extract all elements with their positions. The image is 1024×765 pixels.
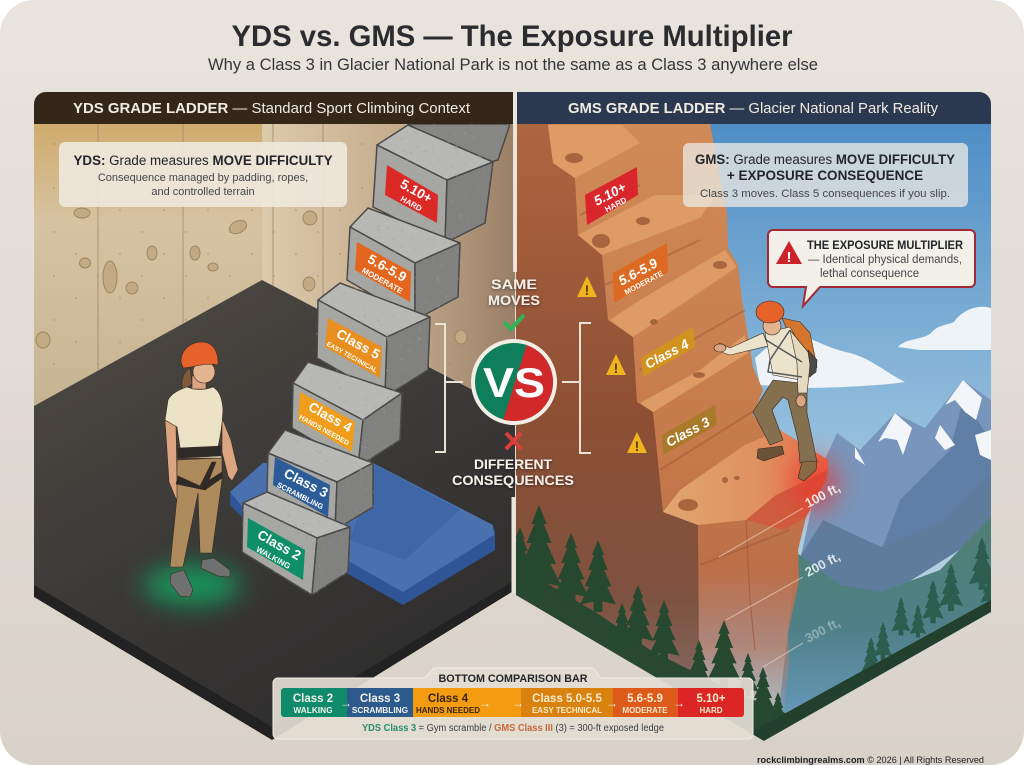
label: class 2: Class 2 — [255, 527, 304, 563]
exposure drop lines — [719, 508, 803, 667]
different consequences label: CONSEQUENCES — [452, 472, 574, 488]
front arm — [715, 333, 768, 355]
ponytail — [182, 368, 192, 390]
label: class 3: Class 3 — [282, 466, 331, 501]
segment: class 5.0-5.5: EASY TECHNICAL — [532, 706, 602, 715]
icon: check — [504, 315, 524, 329]
segment: 5.6-5.9 — [613, 688, 678, 717]
label: class 3: SCRAMBLING — [275, 480, 325, 511]
stone 5.6-5.9 — [347, 208, 460, 320]
segment: 5.6-5.9: 5.6-5.9 — [627, 693, 663, 705]
cliff label: class 3 — [662, 405, 717, 455]
different consequences label: DIFFERENT — [474, 456, 552, 472]
label: class 2 — [247, 518, 305, 580]
straps — [766, 330, 802, 377]
legs — [170, 458, 222, 567]
segment: 5.6-5.9: MODERATE — [622, 706, 668, 715]
stone class 4 — [292, 362, 402, 467]
segment: class 2 — [281, 688, 347, 717]
boots — [757, 446, 784, 461]
wall texture dots — [53, 143, 494, 365]
clouds — [755, 307, 991, 388]
label: class 5 — [325, 318, 383, 378]
mountain snow — [855, 380, 991, 465]
right gym wall — [262, 124, 515, 412]
progression arrows: → — [606, 696, 618, 710]
label: 5.6-5.9 moderate: MODERATE — [360, 266, 405, 296]
helmet — [756, 301, 784, 323]
valley forest haze — [760, 517, 991, 741]
shirt — [165, 387, 223, 458]
figure: alpine climber — [714, 301, 817, 481]
warning triangle 2: ! — [614, 360, 618, 376]
progression arrows: → — [340, 696, 352, 710]
wall holds — [36, 208, 467, 348]
head — [192, 376, 206, 389]
warning triangle 2 — [606, 354, 626, 376]
conifer trees — [506, 505, 788, 730]
different consequences label — [452, 456, 574, 488]
header: GMS ladder — [516, 92, 991, 124]
segment: class 3 — [347, 688, 413, 717]
callout: exposure multiplier: lethal consequence — [820, 268, 919, 280]
lower ledge — [663, 430, 828, 525]
warning triangle 3: ! — [635, 438, 639, 454]
callout: YDS definition: and controlled terrain — [151, 186, 255, 198]
label: 5.10+ hard: HARD — [399, 194, 424, 213]
VS badge — [470, 339, 560, 425]
progression arrows: → — [479, 696, 491, 710]
cliff label: class 4 — [641, 327, 695, 377]
cliff shadow side — [516, 124, 700, 720]
floor — [34, 280, 515, 740]
cliff label: 5.6-5.9 moderate: 5.6-5.9 — [616, 255, 660, 289]
callout: GMS definition: GMS: Grade measures MOVE DIFFICULTY — [695, 152, 955, 167]
head — [763, 317, 781, 335]
segment: 5.10+ — [678, 688, 744, 717]
segment: 5.10+: 5.10+ — [696, 693, 726, 705]
segment: class 2: WALKING — [293, 705, 333, 715]
crash pad — [230, 463, 495, 605]
icon: warning: ! — [786, 249, 792, 266]
rear arm — [790, 330, 810, 393]
stone class 3 — [267, 430, 373, 530]
helmet — [181, 342, 218, 368]
stone class 5 — [317, 283, 430, 397]
warning triangle 1 — [577, 276, 597, 298]
label: 5.10+ hard — [385, 165, 438, 223]
shoes — [170, 570, 193, 597]
stone class 2 — [242, 492, 350, 595]
segment: class 5.0-5.5 — [521, 688, 613, 717]
harness — [178, 446, 221, 458]
segment: class 5.0-5.5: Class 5.0-5.5 — [532, 693, 602, 705]
left bracket — [435, 324, 463, 452]
label: class 4: Class 4 — [306, 399, 355, 435]
segment: class 4: HANDS NEEDED — [416, 706, 480, 715]
callout: YDS definition: YDS: Grade measures MOVE DIFFICULTY — [74, 153, 332, 168]
same moves label: SAME — [491, 276, 537, 292]
panel: YDS gym context — [34, 124, 515, 740]
bar heading: BOTTOM COMPARISON BAR — [438, 673, 588, 685]
segment: class 4 — [413, 688, 521, 717]
cliff label: 5.6-5.9 moderate: MODERATE — [623, 269, 665, 297]
header: YDS ladder: YDS GRADE LADDER — Standard Sport Climbing Context — [73, 100, 471, 117]
valley trees — [861, 537, 1000, 675]
title: YDS vs. GMS — The Exposure Multiplier — [232, 20, 793, 53]
bar footnote: YDS Class 3 = Gym scramble / GMS Class III (3) = 300-ft exposed ledge — [362, 723, 664, 734]
callout: GMS definition: Class 3 moves. Class 5 consequences if you slip. — [700, 188, 950, 200]
label: 5.10+ hard: 5.10+ — [398, 176, 435, 206]
figure: gym climber — [165, 342, 238, 597]
warning triangle 3 — [627, 432, 647, 454]
cliff face — [516, 124, 828, 720]
ledge front rim — [746, 470, 828, 530]
loose rocks — [565, 153, 740, 511]
same moves label: MOVES — [488, 292, 540, 308]
label: class 4 — [298, 392, 355, 452]
progression arrows: → — [673, 696, 685, 710]
bottom comparison bar — [273, 668, 753, 739]
cliff label: 5.6-5.9 moderate — [613, 243, 668, 303]
cliff label: 5.10+ hard — [585, 167, 638, 225]
cliff label: class 4: Class 4 — [642, 336, 692, 372]
segment: class 2: Class 2 — [293, 693, 333, 705]
cliff ledges — [548, 125, 748, 412]
warning triangle 1: ! — [585, 282, 589, 298]
exposure drop markers: 300 ft, — [802, 615, 843, 646]
far mountains — [798, 380, 991, 600]
subtitle: Why a Class 3 in Glacier National Park is not the same as a Class 3 anywhere else — [208, 55, 818, 74]
torso — [765, 327, 810, 380]
segment: class 3: SCRAMBLING — [352, 705, 408, 715]
label: 5.6-5.9 moderate: 5.6-5.9 — [365, 251, 409, 285]
progression arrows: → — [512, 696, 524, 710]
exposure drop markers — [802, 480, 843, 646]
left gym wall — [34, 124, 262, 406]
stone ladder — [242, 124, 510, 595]
exposure drop markers: 200 ft, — [802, 549, 843, 580]
base slab — [745, 600, 991, 741]
segment: class 4: Class 4 — [428, 693, 469, 705]
rock strata — [580, 185, 790, 565]
green floor glow — [144, 565, 240, 605]
label: 5.6-5.9 moderate — [355, 242, 411, 302]
legs — [753, 380, 817, 463]
label: class 4: HANDS NEEDED — [298, 414, 350, 447]
label: class 3 — [273, 457, 331, 517]
callout: exposure multiplier: — Identical physical demands, — [808, 254, 962, 266]
icon: cross — [506, 433, 521, 449]
column edge — [746, 520, 755, 650]
callout: YDS definition — [59, 142, 347, 207]
segment: 5.10+: HARD — [699, 706, 723, 715]
callout: GMS definition — [683, 143, 968, 207]
stone 5.10+ — [373, 125, 493, 243]
forest floor — [516, 565, 790, 741]
arms — [164, 420, 177, 500]
label: class 2: WALKING — [255, 545, 292, 571]
right bracket — [562, 323, 591, 453]
wall panel seams — [98, 124, 323, 370]
icon: warning — [776, 241, 802, 266]
panel: GMS Glacier reality — [506, 124, 1000, 741]
cliff label: 5.10+ hard: 5.10+ — [591, 179, 629, 209]
label: class 5: EASY TECHNICAL — [325, 341, 378, 375]
cliff label: class 3: Class 3 — [663, 414, 713, 450]
red danger glow — [791, 456, 839, 512]
sky — [710, 124, 991, 581]
callout: exposure multiplier: THE EXPOSURE MULTIPLIER — [807, 240, 964, 252]
top stone — [408, 124, 510, 165]
cliff label: 5.10+ hard: HARD — [604, 195, 628, 214]
progression arrows — [340, 696, 685, 710]
callout: YDS definition: Consequence managed by padding, ropes, — [98, 172, 308, 184]
callout: GMS definition: + EXPOSURE CONSEQUENCE — [727, 168, 923, 183]
header: YDS ladder — [34, 92, 515, 124]
header: GMS ladder: GMS GRADE LADDER — Glacier National Park Reality — [568, 100, 938, 117]
segment: class 3: Class 3 — [360, 693, 400, 705]
same moves label — [488, 276, 540, 308]
label: class 5: Class 5 — [334, 326, 383, 362]
backpack — [782, 318, 817, 377]
VS badge: VS — [483, 359, 545, 406]
centre divider — [512, 92, 517, 593]
floor edge — [34, 580, 515, 740]
callout: exposure multiplier — [768, 230, 975, 306]
exposure drop markers: 100 ft, — [802, 480, 843, 511]
